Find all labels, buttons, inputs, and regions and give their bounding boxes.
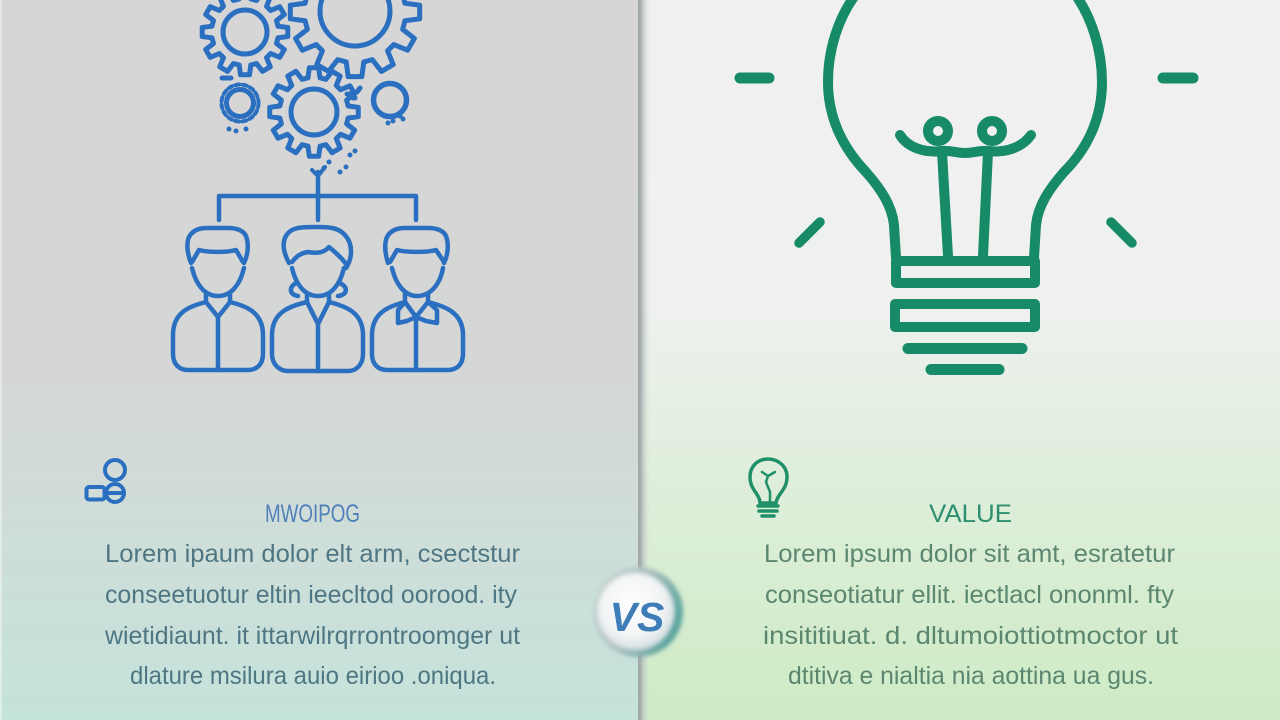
- screw base: [896, 261, 1035, 283]
- panel: right value background: [638, 0, 1280, 720]
- heading: method: MWOIPOG: [265, 500, 360, 528]
- light rays: [740, 72, 1193, 84]
- text block: value description: Lorem ipsum dolor sit amt, esratetur: [764, 540, 1175, 568]
- text block: value description: insititiuat. d. dltumoiottiotmoctor ut: [763, 622, 1178, 650]
- panel: left method background: [0, 0, 638, 720]
- text block: method description: Lorem ipaum dolor elt arm, csectstur: [105, 540, 520, 568]
- person: middle: [272, 227, 363, 371]
- centre divider: [638, 0, 650, 720]
- icon: team of three people: [173, 227, 463, 371]
- org chart connector: [219, 172, 416, 220]
- filament: [900, 121, 1031, 256]
- icon: light bulb: [740, 0, 1193, 370]
- vs badge: VS: [610, 594, 664, 640]
- text block: value description: conseotiatur ellit. iectlacl ononml. fty: [765, 581, 1175, 609]
- icon: small method glyph: [86, 460, 125, 502]
- icon: small value bulb: [750, 459, 787, 516]
- text block: method description: wietidiaunt. it ittarwilrqrrontroomger ut: [104, 622, 520, 650]
- text block: method description: dlature msilura auio eirioo .oniqua.: [130, 662, 496, 690]
- person: left: [173, 228, 263, 370]
- text block: value description: [763, 540, 1178, 690]
- heading: value: VALUE: [929, 500, 1012, 528]
- text block: method description: conseetuotur eltin ieecltod oorood. ity: [105, 581, 517, 609]
- bulb glass: [828, 0, 896, 258]
- left edge highlight: [0, 0, 3, 720]
- icon: gears cluster: [202, 0, 420, 176]
- text block: method description: [104, 540, 520, 690]
- text block: value description: dtitiva e nialtia nia aottina ua gus.: [788, 662, 1154, 690]
- person: right: [372, 228, 463, 370]
- vs badge: [593, 567, 683, 657]
